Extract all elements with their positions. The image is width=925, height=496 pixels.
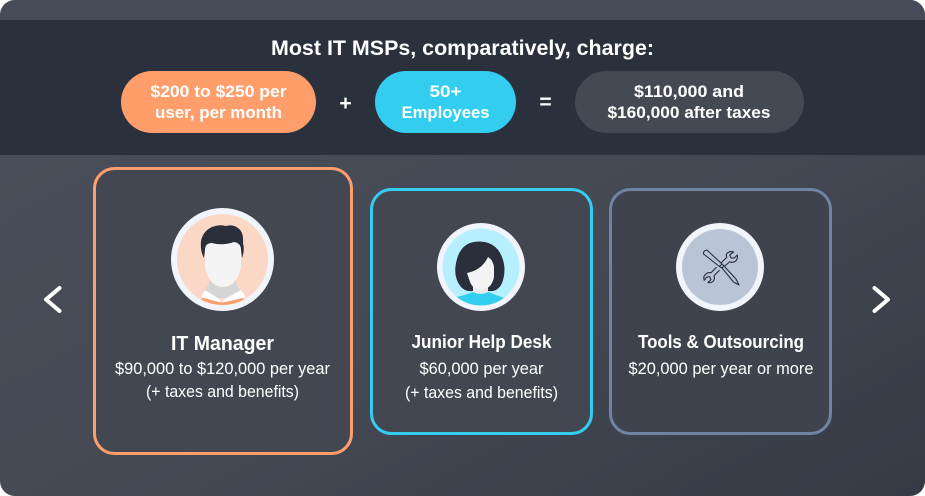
text: IT Manager cost [115, 360, 330, 401]
text: Junior Help Desk cost: (+ taxes and benefits) [405, 384, 558, 402]
pill: total cost: $110,000 and [634, 82, 744, 101]
pill: price per user: user, per month [155, 103, 282, 122]
pill: total cost: $160,000 after taxes [608, 103, 770, 122]
text: IT Manager cost: (+ taxes and benefits) [146, 383, 299, 401]
title: Most IT MSPs, comparatively, charge: [271, 36, 654, 60]
icon: crossed tools [676, 223, 764, 311]
text: IT Manager cost: $90,000 to $120,000 per year [115, 360, 330, 378]
pill: total cost [575, 71, 804, 133]
pill: employees [375, 71, 516, 133]
icon: man portrait [171, 208, 274, 320]
icon: woman portrait [437, 223, 525, 312]
text: Tools cost: $20,000 per year or more [628, 360, 814, 378]
panel: IT Manager [94, 168, 352, 454]
plus sign: + [339, 92, 352, 115]
equals sign: = [539, 91, 552, 114]
heading: Tools and Outsourcing: Tools & Outsourcing [638, 332, 804, 352]
panel: Junior Help Desk [372, 190, 592, 434]
heading: IT Manager: IT Manager [171, 333, 274, 355]
arrow: previous [46, 288, 60, 311]
pill: price per user: $200 to $250 per [150, 82, 287, 101]
panel: Tools and Outsourcing [610, 190, 830, 434]
pill: employees: 50+ [430, 82, 462, 101]
pill: price per user [121, 71, 316, 133]
heading: Junior Help Desk: Junior Help Desk [412, 332, 552, 352]
arrow: next [874, 288, 888, 311]
text: Junior Help Desk cost: $60,000 per year [420, 360, 544, 378]
pill: employees: Employees [402, 103, 490, 122]
text: Junior Help Desk cost [405, 360, 558, 402]
